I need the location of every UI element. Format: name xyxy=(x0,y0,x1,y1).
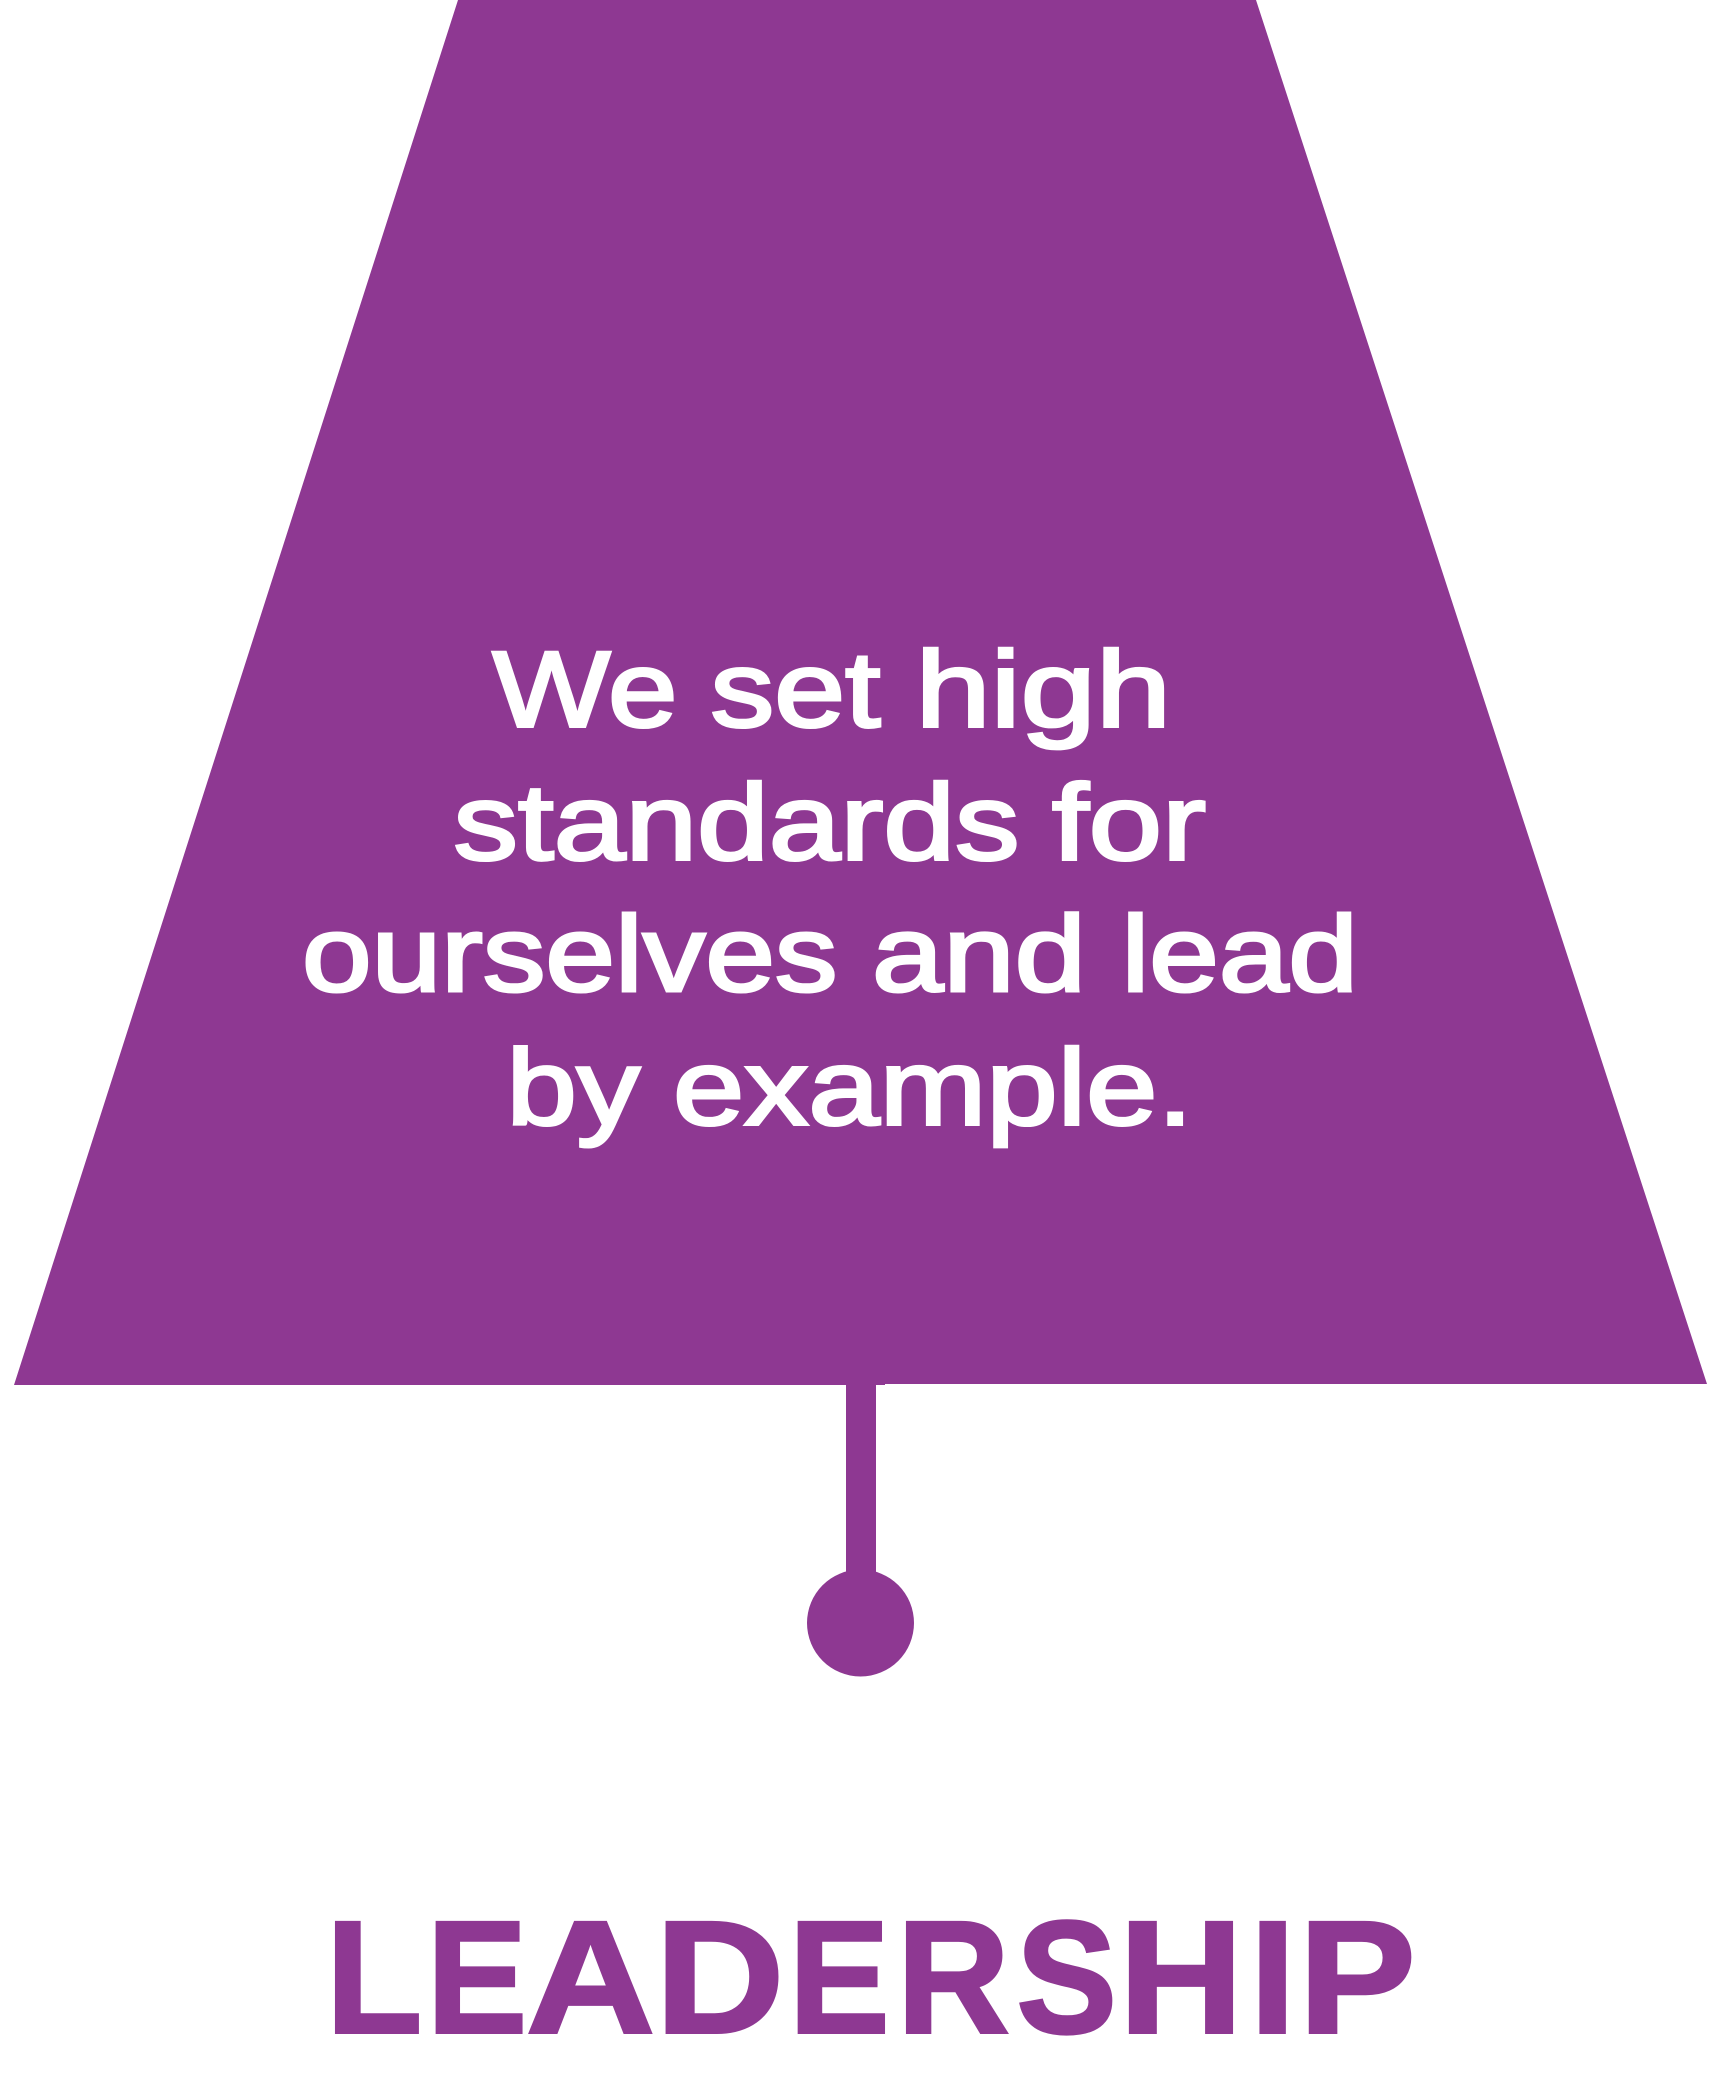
heading: LEADERSHIP: A xyxy=(526,1888,655,2066)
text block: leadership statement: set xyxy=(710,628,880,750)
connector: stem and dot xyxy=(807,1380,914,1676)
text block: leadership statement: high xyxy=(916,628,1171,750)
text block: leadership statement: standards xyxy=(454,762,1020,882)
heading: LEADERSHIP: S xyxy=(1016,1888,1117,2066)
heading: LEADERSHIP: I xyxy=(1250,1888,1295,2066)
heading: LEADERSHIP: P xyxy=(1299,1888,1416,2066)
text block: leadership statement: by xyxy=(506,1026,640,1148)
heading: LEADERSHIP: E xyxy=(789,1888,890,2066)
text block: leadership statement: example. xyxy=(673,1026,1193,1148)
text block: leadership statement: ourselves xyxy=(302,893,838,1014)
heading: LEADERSHIP: R xyxy=(897,1888,1010,2066)
panel: purple trapezoid xyxy=(14,0,1707,1385)
text block: leadership statement: and xyxy=(872,893,1086,1014)
text block: leadership statement: We xyxy=(492,628,678,750)
heading: LEADERSHIP: D xyxy=(655,1888,784,2066)
heading: LEADERSHIP: L xyxy=(326,1888,422,2066)
text block: leadership statement xyxy=(302,628,1358,1148)
heading: LEADERSHIP: H xyxy=(1119,1888,1243,2066)
heading: LEADERSHIP: E xyxy=(427,1888,527,2066)
text block: leadership statement: lead xyxy=(1122,893,1358,1014)
text block: leadership statement: for xyxy=(1052,762,1206,882)
